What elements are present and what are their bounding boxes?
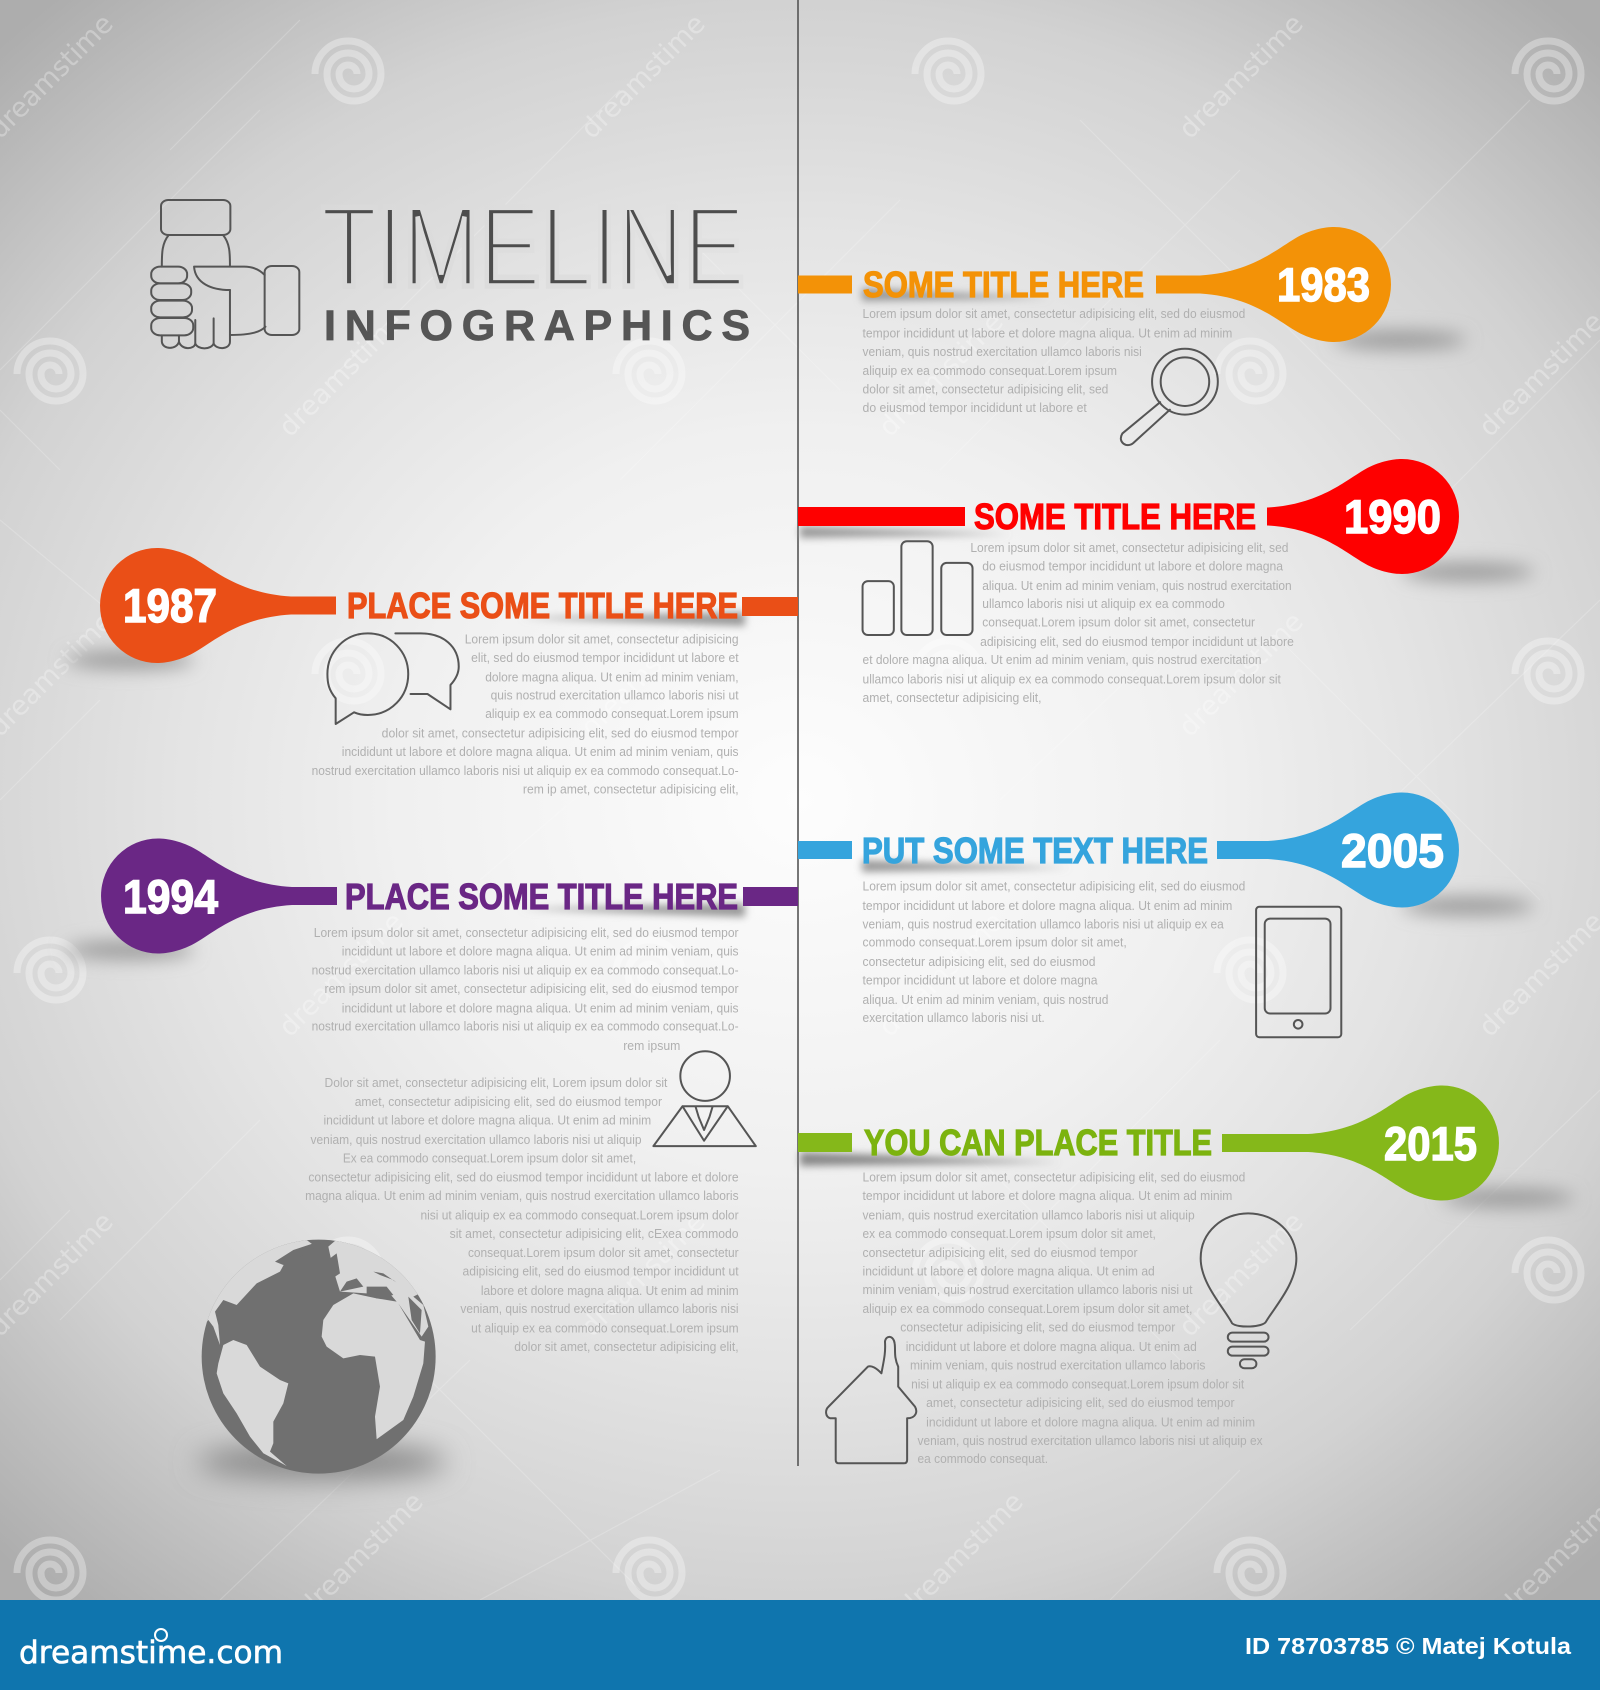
text block 1994 lower: Dolor sit amet, consectetur adipisicing elit, Lorem ipsum dolor sit [325, 1075, 668, 1090]
text block 1994 lower: Ex ea commodo consequat.Lorem ipsum dolor sit amet, [343, 1150, 636, 1165]
text block 1990 [863, 540, 1294, 705]
text block 2005: veniam, quis nostrud exercitation ullamco laboris nisi ut aliquip ex ea [863, 916, 1224, 931]
text block 2015: consectetur adipisicing elit, sed do eiusmod tempor [900, 1320, 1176, 1335]
text block 2015: minim veniam, quis nostrud exercitation ullamco laboris [910, 1357, 1206, 1372]
icon: house [826, 1337, 916, 1463]
text block 1994 lower: consequat.Lorem ipsum dolor sit amet, consectetur [468, 1245, 739, 1260]
watermark pattern: dreamstime [575, 1206, 712, 1343]
text block 1987: dolor sit amet, consectetur adipisicing elit, sed do eiusmod tempor [382, 725, 739, 740]
text block 1987: dolore magna aliqua. Ut enim ad minim veniam, [485, 669, 739, 684]
text block 1994 top: nostrud exercitation ullamco laboris nisi ut aliquip ex ea commodo consequat.Lo- [312, 1019, 739, 1034]
text block 1994 lower [305, 1075, 739, 1354]
milestone 1983: 1983 [1277, 258, 1370, 311]
milestone 1990: 1990 [1344, 490, 1441, 543]
text block 1987: quis nostrud exercitation ullamco laboris nisi ut [491, 688, 739, 703]
text block 1994 lower: magna aliqua. Ut enim ad minim veniam, quis nostrud exercitation ullamco laboris [305, 1188, 739, 1203]
text block 2015: nisi ut aliquip ex ea commodo consequat.Lorem ipsum dolor sit [911, 1377, 1245, 1392]
milestone 2015: YOU CAN PLACE TITLE [864, 1122, 1212, 1163]
text block 1990: adipisicing elit, sed do eiusmod tempor incididunt ut labore [980, 634, 1294, 649]
text block 1994 lower: veniam, quis nostrud exercitation ullamco laboris nisi [460, 1301, 739, 1316]
watermark pattern: dreamstime [1173, 1206, 1310, 1343]
text block 1987: elit, sed do eiusmod tempor incididunt ut labore et [471, 650, 739, 665]
milestone 2005 [798, 792, 1534, 915]
text block 1994 top: incididunt ut labore et dolore magna aliqua. Ut enim ad minim veniam, quis [342, 943, 739, 958]
watermark pattern: dreamstime [575, 606, 712, 743]
text block 1994 lower: consectetur adipisicing elit, sed do eiusmod tempor incididunt ut labore et dolore [308, 1170, 739, 1185]
text block 1987: incididunt ut labore et dolore magna aliqua. Ut enim ad minim veniam, quis [342, 744, 739, 759]
text block 1994 lower: veniam, quis nostrud exercitation ullamco laboris nisi ut aliquip [311, 1132, 642, 1147]
watermark pattern: dreamstime [575, 8, 712, 145]
text block 2015: Lorem ipsum dolor sit amet, consectetur adipisicing elit, sed do eiusmod [863, 1170, 1245, 1185]
footer bar [0, 1600, 1600, 1690]
text block 1983: Lorem ipsum dolor sit amet, consectetur adipisicing elit, sed do eiusmod [863, 306, 1245, 321]
text block 2005 [863, 879, 1245, 1025]
text block 2005: consectetur adipisicing elit, sed do eiusmod [863, 954, 1095, 969]
text block 1994 lower: dolor sit amet, consectetur adipisicing elit, [514, 1339, 739, 1354]
text block 1987 [312, 632, 739, 797]
text block 1983: dolor sit amet, consectetur adipisicing elit, sed [863, 382, 1108, 397]
title: TIMELINE [321, 184, 745, 311]
globe [202, 1240, 436, 1474]
text block 2005: tempor incididunt ut labore et dolore magna aliqua. Ut enim ad minim [863, 898, 1232, 913]
text block 2015: veniam, quis nostrud exercitation ullamco laboris nisi ut aliquip [863, 1207, 1195, 1222]
text block 1994 top: nostrud exercitation ullamco laboris nisi ut aliquip ex ea commodo consequat.Lo- [312, 963, 739, 978]
icon: business person [653, 1051, 756, 1146]
text block 1983: aliquip ex ea commodo consequat.Lorem ipsum [863, 363, 1117, 378]
text block 1990: do eiusmod tempor incididunt ut labore et dolore magna [982, 558, 1284, 573]
text block 2005: aliqua. Ut enim ad minim veniam, quis nostrud [863, 992, 1108, 1007]
text block 1987: rem ip amet, consectetur adipisicing elit, [523, 782, 739, 797]
text block 2015: aliquip ex ea commodo consequat.Lorem ipsum dolor sit amet, [863, 1301, 1192, 1316]
text block 1994 lower: adipisicing elit, sed do eiusmod tempor incididunt ut [463, 1264, 739, 1279]
text block 1994 top: incididunt ut labore et dolore magna aliqua. Ut enim ad minim veniam, quis [342, 1000, 739, 1015]
text block 1994 lower: labore et dolore magna aliqua. Ut enim ad minim [481, 1283, 739, 1298]
milestone 1994: PLACE SOME TITLE HERE [345, 876, 738, 917]
text block 1990: et dolore magna aliqua. Ut enim ad minim veniam, quis nostrud exercitation [863, 652, 1261, 667]
text block 1994 lower: amet, consectetur adipisicing elit, sed do eiusmod tempor [355, 1094, 663, 1109]
milestone 2015 [798, 1086, 1574, 1207]
title [321, 184, 750, 350]
milestone 1987: PLACE SOME TITLE HERE [347, 585, 738, 626]
text block 2015: veniam, quis nostrud exercitation ullamco laboris nisi ut aliquip ex [918, 1433, 1263, 1448]
text block 1994 lower: ut aliquip ex ea commodo consequat.Lorem ipsum [471, 1321, 739, 1336]
icon: speech bubbles [327, 633, 459, 724]
footer logo: dreamstime.com [19, 1635, 283, 1671]
milestone 1983 [798, 227, 1466, 349]
text block 1994 top [312, 925, 739, 1053]
text block 2015: incididunt ut labore et dolore magna aliqua. Ut enim ad [906, 1339, 1197, 1354]
text block 2015: consectetur adipisicing elit, sed do eiusmod tempor [863, 1245, 1138, 1260]
milestone 1987 [66, 548, 798, 669]
text block 1994 top: rem ipsum [623, 1038, 680, 1053]
text block 1990: Lorem ipsum dolor sit amet, consectetur adipisicing elit, sed [970, 540, 1288, 555]
text block 2015: ea commodo consequat. [918, 1451, 1048, 1466]
watermark pattern: dreamstime [293, 1486, 430, 1623]
text block 1990: aliqua. Ut enim ad minim veniam, quis nostrud exercitation [982, 578, 1292, 593]
text block 2015: ex ea commodo consequat.Lorem ipsum dolor sit amet, [863, 1226, 1156, 1241]
text block 2015 [863, 1170, 1263, 1466]
watermark pattern: dreamstime [873, 906, 1010, 1043]
text block 2005: Lorem ipsum dolor sit amet, consectetur adipisicing elit, sed do eiusmod [863, 879, 1245, 894]
text block 1994 top: rem ipsum dolor sit amet, consectetur adipisicing elit, sed do eiusmod tempor [325, 981, 739, 996]
icon: tablet [1256, 907, 1341, 1037]
watermark pattern: dreamstime [273, 306, 410, 443]
milestone 1987: 1987 [123, 579, 217, 632]
footer credit: ID 78703785 © Matej Kotula [1245, 1633, 1571, 1659]
text block 1990: consequat.Lorem ipsum dolor sit amet, consectetur [982, 614, 1256, 629]
text block 1990: amet, consectetur adipisicing elit, [863, 690, 1042, 705]
text block 1994 top: Lorem ipsum dolor sit amet, consectetur adipisicing elit, sed do eiusmod tempor [314, 925, 739, 940]
text block 1994 lower: sit amet, consectetur adipisicing elit, cExea commodo [450, 1226, 739, 1241]
watermark pattern: dreamstime [873, 306, 1010, 443]
icon: light bulb [1201, 1213, 1296, 1368]
text block 1983 [863, 306, 1245, 415]
milestone 1994: 1994 [123, 870, 218, 923]
text block 1994 lower: incididunt ut labore et dolore magna aliqua. Ut enim ad minim [323, 1113, 651, 1128]
globe shadow [197, 1444, 447, 1480]
text block 1983: do eiusmod tempor incididunt ut labore et [863, 400, 1087, 415]
icon: magnifying glass [1121, 349, 1218, 445]
milestone 2005: PUT SOME TEXT HERE [862, 830, 1208, 871]
text block 2015: minim veniam, quis nostrud exercitation ullamco laboris nisi ut [863, 1282, 1193, 1297]
text block 2005: commodo consequat.Lorem ipsum dolor sit amet, [863, 935, 1127, 950]
text block 2005: tempor incididunt ut labore et dolore magna [863, 972, 1098, 987]
text block 2015: tempor incididunt ut labore et dolore magna aliqua. Ut enim ad minim [863, 1188, 1232, 1203]
milestone 1983: SOME TITLE HERE [863, 264, 1144, 305]
watermark pattern: dreamstime [273, 906, 410, 1043]
title: INFOGRAPHICS [324, 302, 750, 350]
text block 2005: exercitation ullamco laboris nisi ut. [863, 1010, 1045, 1025]
text block 1983: veniam, quis nostrud exercitation ullamco laboris nisi [863, 344, 1142, 359]
milestone 2015: 2015 [1384, 1117, 1477, 1170]
milestone 2005: 2005 [1341, 824, 1444, 877]
icon: bar chart [863, 541, 973, 635]
timeline vertical axis [797, 0, 799, 1466]
text block 1990: ullamco laboris nisi ut aliquip ex ea commodo [982, 596, 1225, 611]
text block 1987: nostrud exercitation ullamco laboris nisi ut aliquip ex ea commodo consequat.Lo- [312, 763, 739, 778]
text block 1987: aliquip ex ea commodo consequat.Lorem ipsum [485, 706, 739, 721]
text block 1983: tempor incididunt ut labore et dolore magna aliqua. Ut enim ad minim [863, 325, 1232, 340]
milestone 1990 [798, 459, 1534, 581]
text block 2015: amet, consectetur adipisicing elit, sed do eiusmod tempor [926, 1395, 1235, 1410]
icon: two hands gripping [151, 200, 299, 348]
watermark pattern: dreamstime [893, 1486, 1030, 1623]
text block 2015: incididunt ut labore et dolore magna aliqua. Ut enim ad minim [926, 1414, 1255, 1429]
watermark pattern: dreamstime [1173, 8, 1310, 145]
text block 1990: ullamco laboris nisi ut aliquip ex ea commodo consequat.Lorem ipsum dolor sit [863, 672, 1281, 687]
milestone 1994 [66, 838, 798, 959]
watermark pattern: dreamstime [1173, 606, 1310, 743]
text block 1987: Lorem ipsum dolor sit amet, consectetur adipisicing [465, 632, 739, 647]
milestone 1990: SOME TITLE HERE [974, 496, 1256, 537]
text block 2015: incididunt ut labore et dolore magna aliqua. Ut enim ad [863, 1264, 1155, 1279]
text block 1994 lower: nisi ut aliquip ex ea commodo consequat.Lorem ipsum dolor [420, 1207, 739, 1222]
